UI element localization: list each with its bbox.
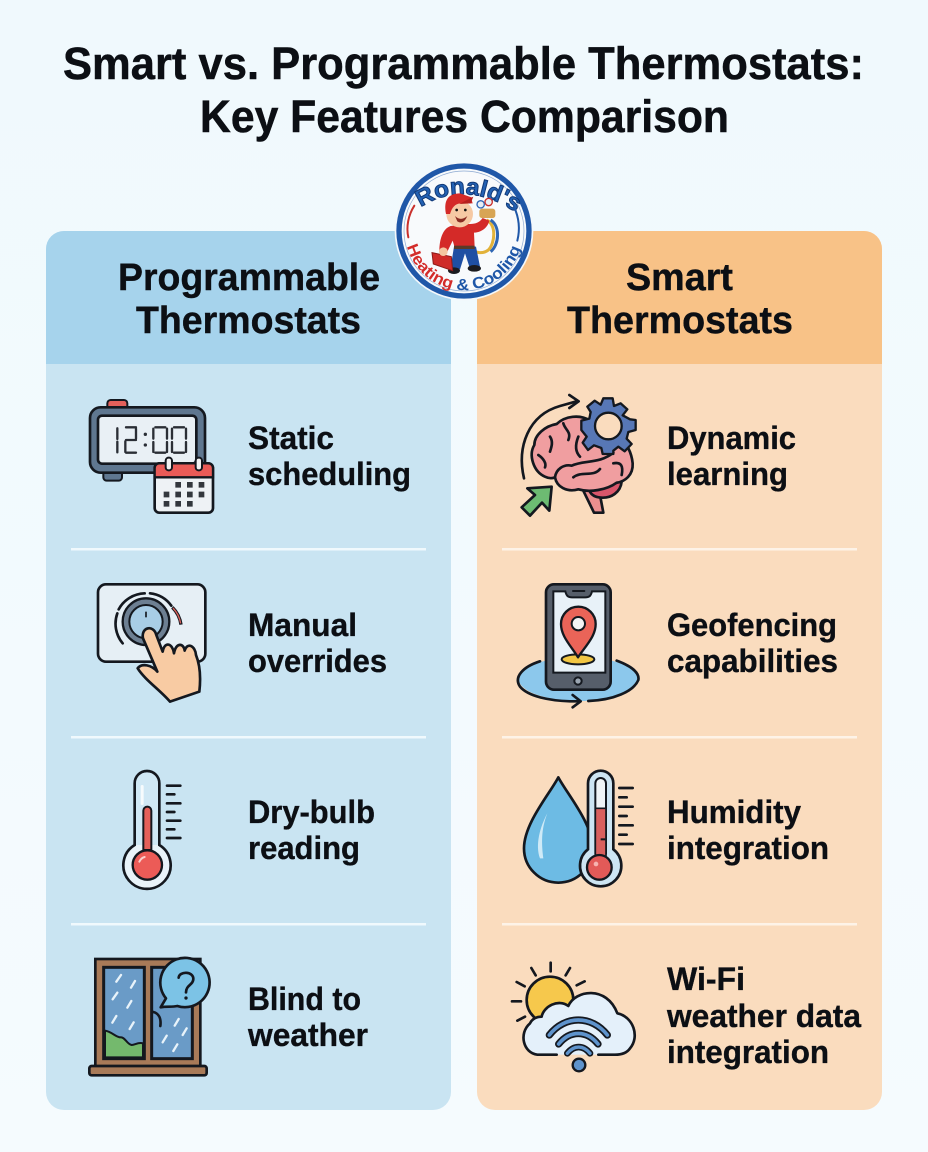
title: Smart vs. Programmable Thermostats: [63,38,864,89]
icon: thermostat dial with pressing hand [98,584,205,702]
text: blind to weather: weather [247,1017,368,1053]
panel header: smart [477,231,882,364]
text: wi-fi weather data integration: integration [667,1034,829,1070]
mascot technician [432,193,498,274]
text: manual overrides [248,607,387,679]
panel: smart thermostats [477,231,882,1110]
text: static scheduling [248,420,411,492]
text: blind to weather [247,981,368,1053]
logo bottom text: Heating & Cooling [407,244,522,291]
panel header: programmable [46,231,451,364]
text: geofencing capabilities: Geofencing [667,607,837,643]
text: geofencing capabilities: capabilities [667,643,838,679]
text: dry-bulb reading [248,794,375,866]
panel: programmable thermostats [46,231,451,1110]
text: manual overrides: overrides [248,643,387,679]
panel header: programmable: Thermostats [136,300,361,342]
text: wi-fi weather data integration [666,961,861,1070]
text: static scheduling: Static [248,420,334,456]
panel header: smart: Smart [626,257,733,299]
text: dry-bulb reading: reading [248,830,360,866]
text: manual overrides: Manual [248,607,357,643]
text: dynamic learning: Dynamic [667,420,796,456]
icon: brain with gear and arrows [522,395,636,516]
text: wi-fi weather data integration: weather data [666,998,861,1034]
title [63,38,864,142]
panel header: programmable: Programmable [118,257,380,299]
logo top text: Ronald's [414,179,520,211]
panel header: smart: Thermostats [567,300,793,342]
text: dry-bulb reading: Dry-bulb [248,794,375,830]
title: Key Features Comparison [200,91,729,142]
icon: phone with location pin [518,584,639,707]
text: humidity integration: integration [667,830,829,866]
text: humidity integration: Humidity [667,794,801,830]
icon: rainy window with question bubble [89,958,210,1075]
text: dynamic learning: learning [667,456,788,492]
logo: Ronald's Heating & Cooling [394,163,534,300]
icon: water drop and thermometer [524,771,633,886]
icon: sun, cloud and wifi [512,963,635,1071]
icon: digital clock and calendar [90,400,213,513]
text: wi-fi weather data integration: Wi-Fi [667,961,745,997]
text: geofencing capabilities [667,607,838,679]
text: humidity integration [667,794,829,866]
text: blind to weather: Blind to [248,981,361,1017]
icon: thermometer [123,771,180,889]
text: dynamic learning [667,420,796,492]
text: static scheduling: scheduling [248,456,411,492]
